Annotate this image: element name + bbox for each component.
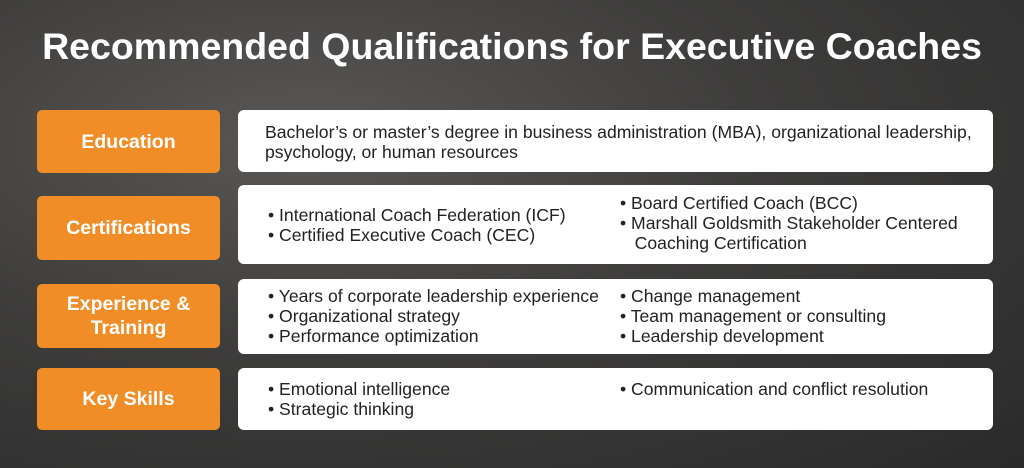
panel: certifications: • Marshall Goldsmith Stakeholder Centered — [620, 213, 958, 233]
label: Key Skills: Key Skills — [82, 388, 175, 410]
panel: certifications: • Certified Executive Coach (CEC) — [268, 225, 535, 245]
title: Recommended Qualifications for Executive Coaches — [42, 25, 982, 67]
panel: education: Bachelor’s or master’s degree in business administration (MBA), organizational leadership, — [265, 122, 972, 142]
label: Key Skills — [37, 368, 220, 430]
panel: certifications: Coaching Certification — [635, 233, 807, 253]
label: Certifications — [37, 196, 220, 260]
panel: certifications — [238, 185, 993, 264]
panel: certifications: • International Coach Federation (ICF) — [268, 205, 566, 225]
panel: experience: • Years of corporate leadership experience — [268, 286, 599, 306]
label: Experience & Training: Experience & — [67, 293, 190, 315]
panel: experience: • Organizational strategy — [268, 306, 460, 326]
panel: key skills: • Strategic thinking — [268, 399, 414, 419]
label: Education: Education — [81, 130, 176, 152]
panel: experience: • Change management — [620, 286, 800, 306]
label: Experience & Training — [37, 284, 220, 348]
panel: education: psychology, or human resources — [265, 142, 518, 162]
label: Certifications: Certifications — [66, 217, 191, 239]
panel: key skills: • Emotional intelligence — [268, 379, 450, 399]
panel: key skills — [238, 368, 993, 430]
panel: experience: • Leadership development — [620, 326, 824, 346]
panel: experience: • Performance optimization — [268, 326, 479, 346]
panel: experience — [238, 279, 993, 354]
panel: key skills: • Communication and conflict resolution — [620, 379, 928, 399]
panel: certifications: • Board Certified Coach (BCC) — [620, 193, 858, 213]
label: Experience & Training: Training — [91, 317, 166, 339]
panel: experience: • Team management or consulting — [620, 306, 886, 326]
label: Education — [37, 110, 220, 173]
panel: education — [238, 110, 993, 172]
